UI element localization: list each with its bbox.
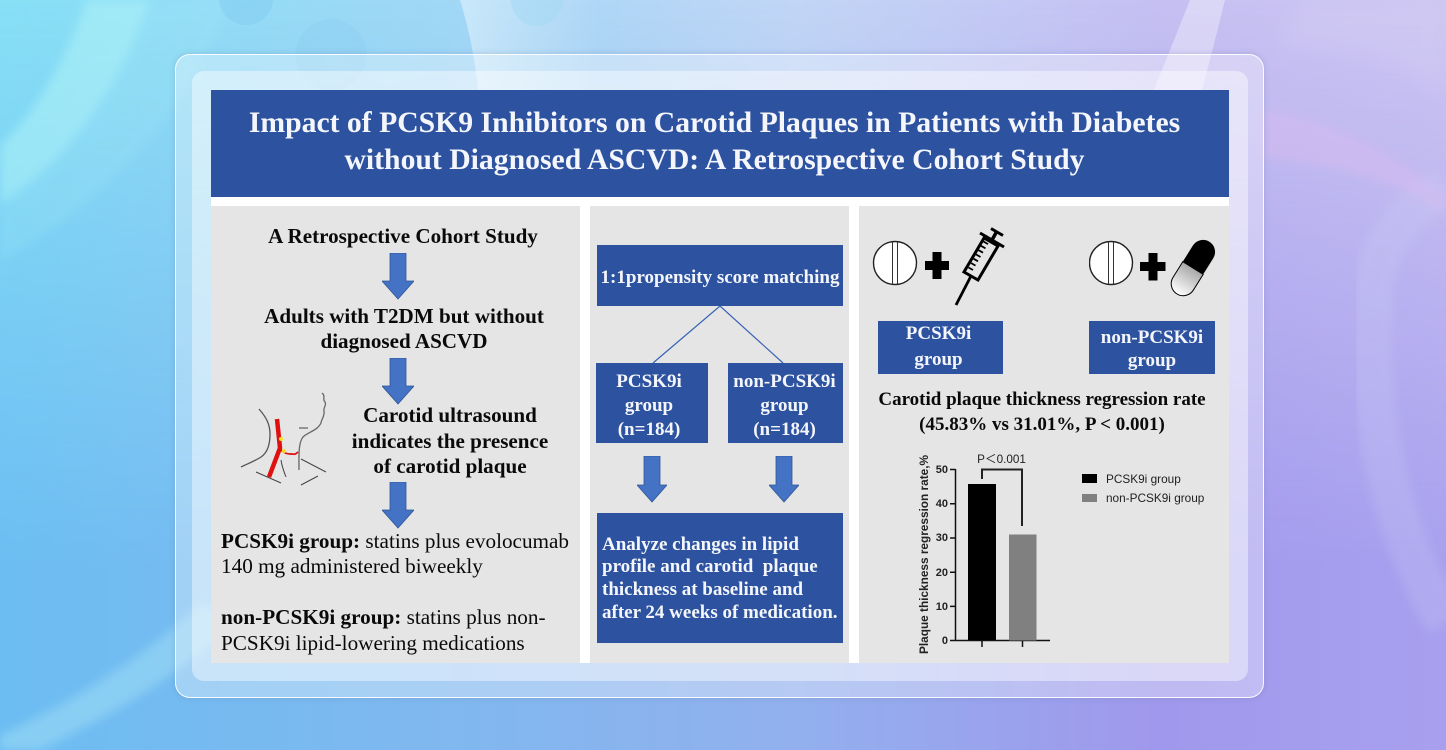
white content sheet	[211, 90, 1229, 663]
inner glass card	[192, 71, 1248, 681]
significance bracket	[982, 470, 1022, 526]
box: non-PCSK9i group: group	[760, 395, 809, 416]
bar: non-PCSK9i group	[1009, 534, 1036, 640]
box: PCSK9i group	[596, 363, 708, 443]
text: regression rate result	[878, 389, 1206, 434]
text: population	[264, 304, 544, 353]
bar chart: plaque thickness regression rate: 0	[942, 635, 948, 647]
box: PCSK9i group: group	[625, 395, 673, 416]
text: group definitions: non-PCSK9i group: statins plus non-	[221, 605, 546, 629]
text: group definitions: PCSK9i group: statins plus evolocumab	[221, 529, 569, 553]
legend: non-PCSK9i group	[1106, 491, 1205, 505]
text: regression rate result: (45.83% vs 31.01%, P < 0.001)	[919, 414, 1165, 434]
box: non-PCSK9i group label: group	[1128, 350, 1176, 371]
panel: matching workflow	[590, 206, 849, 663]
icon: neck with carotid artery	[240, 392, 326, 486]
box: non-PCSK9i group label	[1089, 321, 1215, 374]
box: analysis: after 24 weeks of medication.	[602, 602, 838, 623]
panel: study design	[211, 206, 580, 663]
box: non-PCSK9i group: non-PCSK9i	[733, 371, 836, 392]
box: analysis	[597, 513, 843, 643]
text: population: Adults with T2DM but without	[264, 304, 544, 328]
arrow: non-PCSK9i to analysis	[769, 456, 799, 502]
text: population: diagnosed ASCVD	[320, 329, 488, 353]
box: PCSK9i group: PCSK9i	[616, 371, 682, 392]
text: ultrasound finding: Carotid ultrasound	[363, 403, 537, 427]
icon: tablet plus syringe	[872, 227, 1005, 306]
legend: PCSK9i group	[1106, 472, 1181, 486]
title banner: without Diagnosed ASCVD: A Retrospective Cohort Study	[344, 144, 1085, 176]
heading: study type: A Retrospective Cohort Study	[268, 224, 538, 248]
box: PCSK9i group: (n=184)	[618, 419, 680, 440]
box: propensity score matching: 1:1propensity score matching	[601, 267, 839, 288]
arrow: adults to ultrasound	[382, 358, 414, 404]
bar chart: plaque thickness regression rate: 40	[936, 498, 948, 510]
text: group definitions	[221, 529, 569, 655]
text: ultrasound finding: indicates the presence	[352, 428, 548, 452]
box: PCSK9i group label	[878, 321, 1003, 374]
text: group definitions: PCSK9i lipid-lowering medications	[221, 631, 525, 655]
box: PCSK9i group label: group	[914, 349, 963, 370]
outer glass card	[175, 54, 1264, 698]
text: ultrasound finding	[352, 403, 548, 478]
bar: PCSK9i group	[968, 484, 996, 640]
text: regression rate result: Carotid plaque thickness regression rate	[878, 389, 1206, 410]
arrow: study to adults	[382, 253, 414, 300]
title banner	[211, 90, 1229, 197]
text: ultrasound finding: of carotid plaque	[373, 454, 527, 478]
bar chart: plaque thickness regression rate: 50	[936, 464, 948, 476]
box: analysis: thickness at baseline and	[602, 579, 803, 600]
arrow: PCSK9i to analysis	[637, 456, 667, 502]
panel: results	[859, 206, 1229, 663]
box: non-PCSK9i group	[728, 363, 843, 443]
box: PCSK9i group label: PCSK9i	[906, 323, 971, 344]
bar chart: plaque thickness regression rate: 10	[936, 601, 948, 613]
box: analysis: profile and carotid plaque	[602, 556, 818, 577]
title banner: Impact of PCSK9 Inhibitors on Carotid Plaques in Patients with Diabetes	[249, 107, 1180, 139]
box: non-PCSK9i group: (n=184)	[753, 419, 816, 440]
connector lines	[652, 306, 784, 363]
p value: P＜0.001	[977, 453, 1026, 466]
text: group definitions: 140 mg administered biweekly	[221, 554, 483, 578]
bar chart: plaque thickness regression rate: 30	[936, 532, 948, 544]
legend	[1082, 472, 1205, 505]
box: propensity score matching	[597, 245, 843, 306]
arrow: ultrasound to groups	[382, 482, 414, 528]
icon: tablet plus capsule	[1089, 240, 1216, 296]
bar chart: plaque thickness regression rate	[917, 453, 1205, 654]
bar chart: plaque thickness regression rate: 20	[936, 567, 948, 579]
y axis title: Plaque thickness regression rate,%	[917, 455, 931, 654]
box: analysis: Analyze changes in lipid	[602, 534, 799, 554]
box: non-PCSK9i group label: non-PCSK9i	[1101, 327, 1203, 348]
